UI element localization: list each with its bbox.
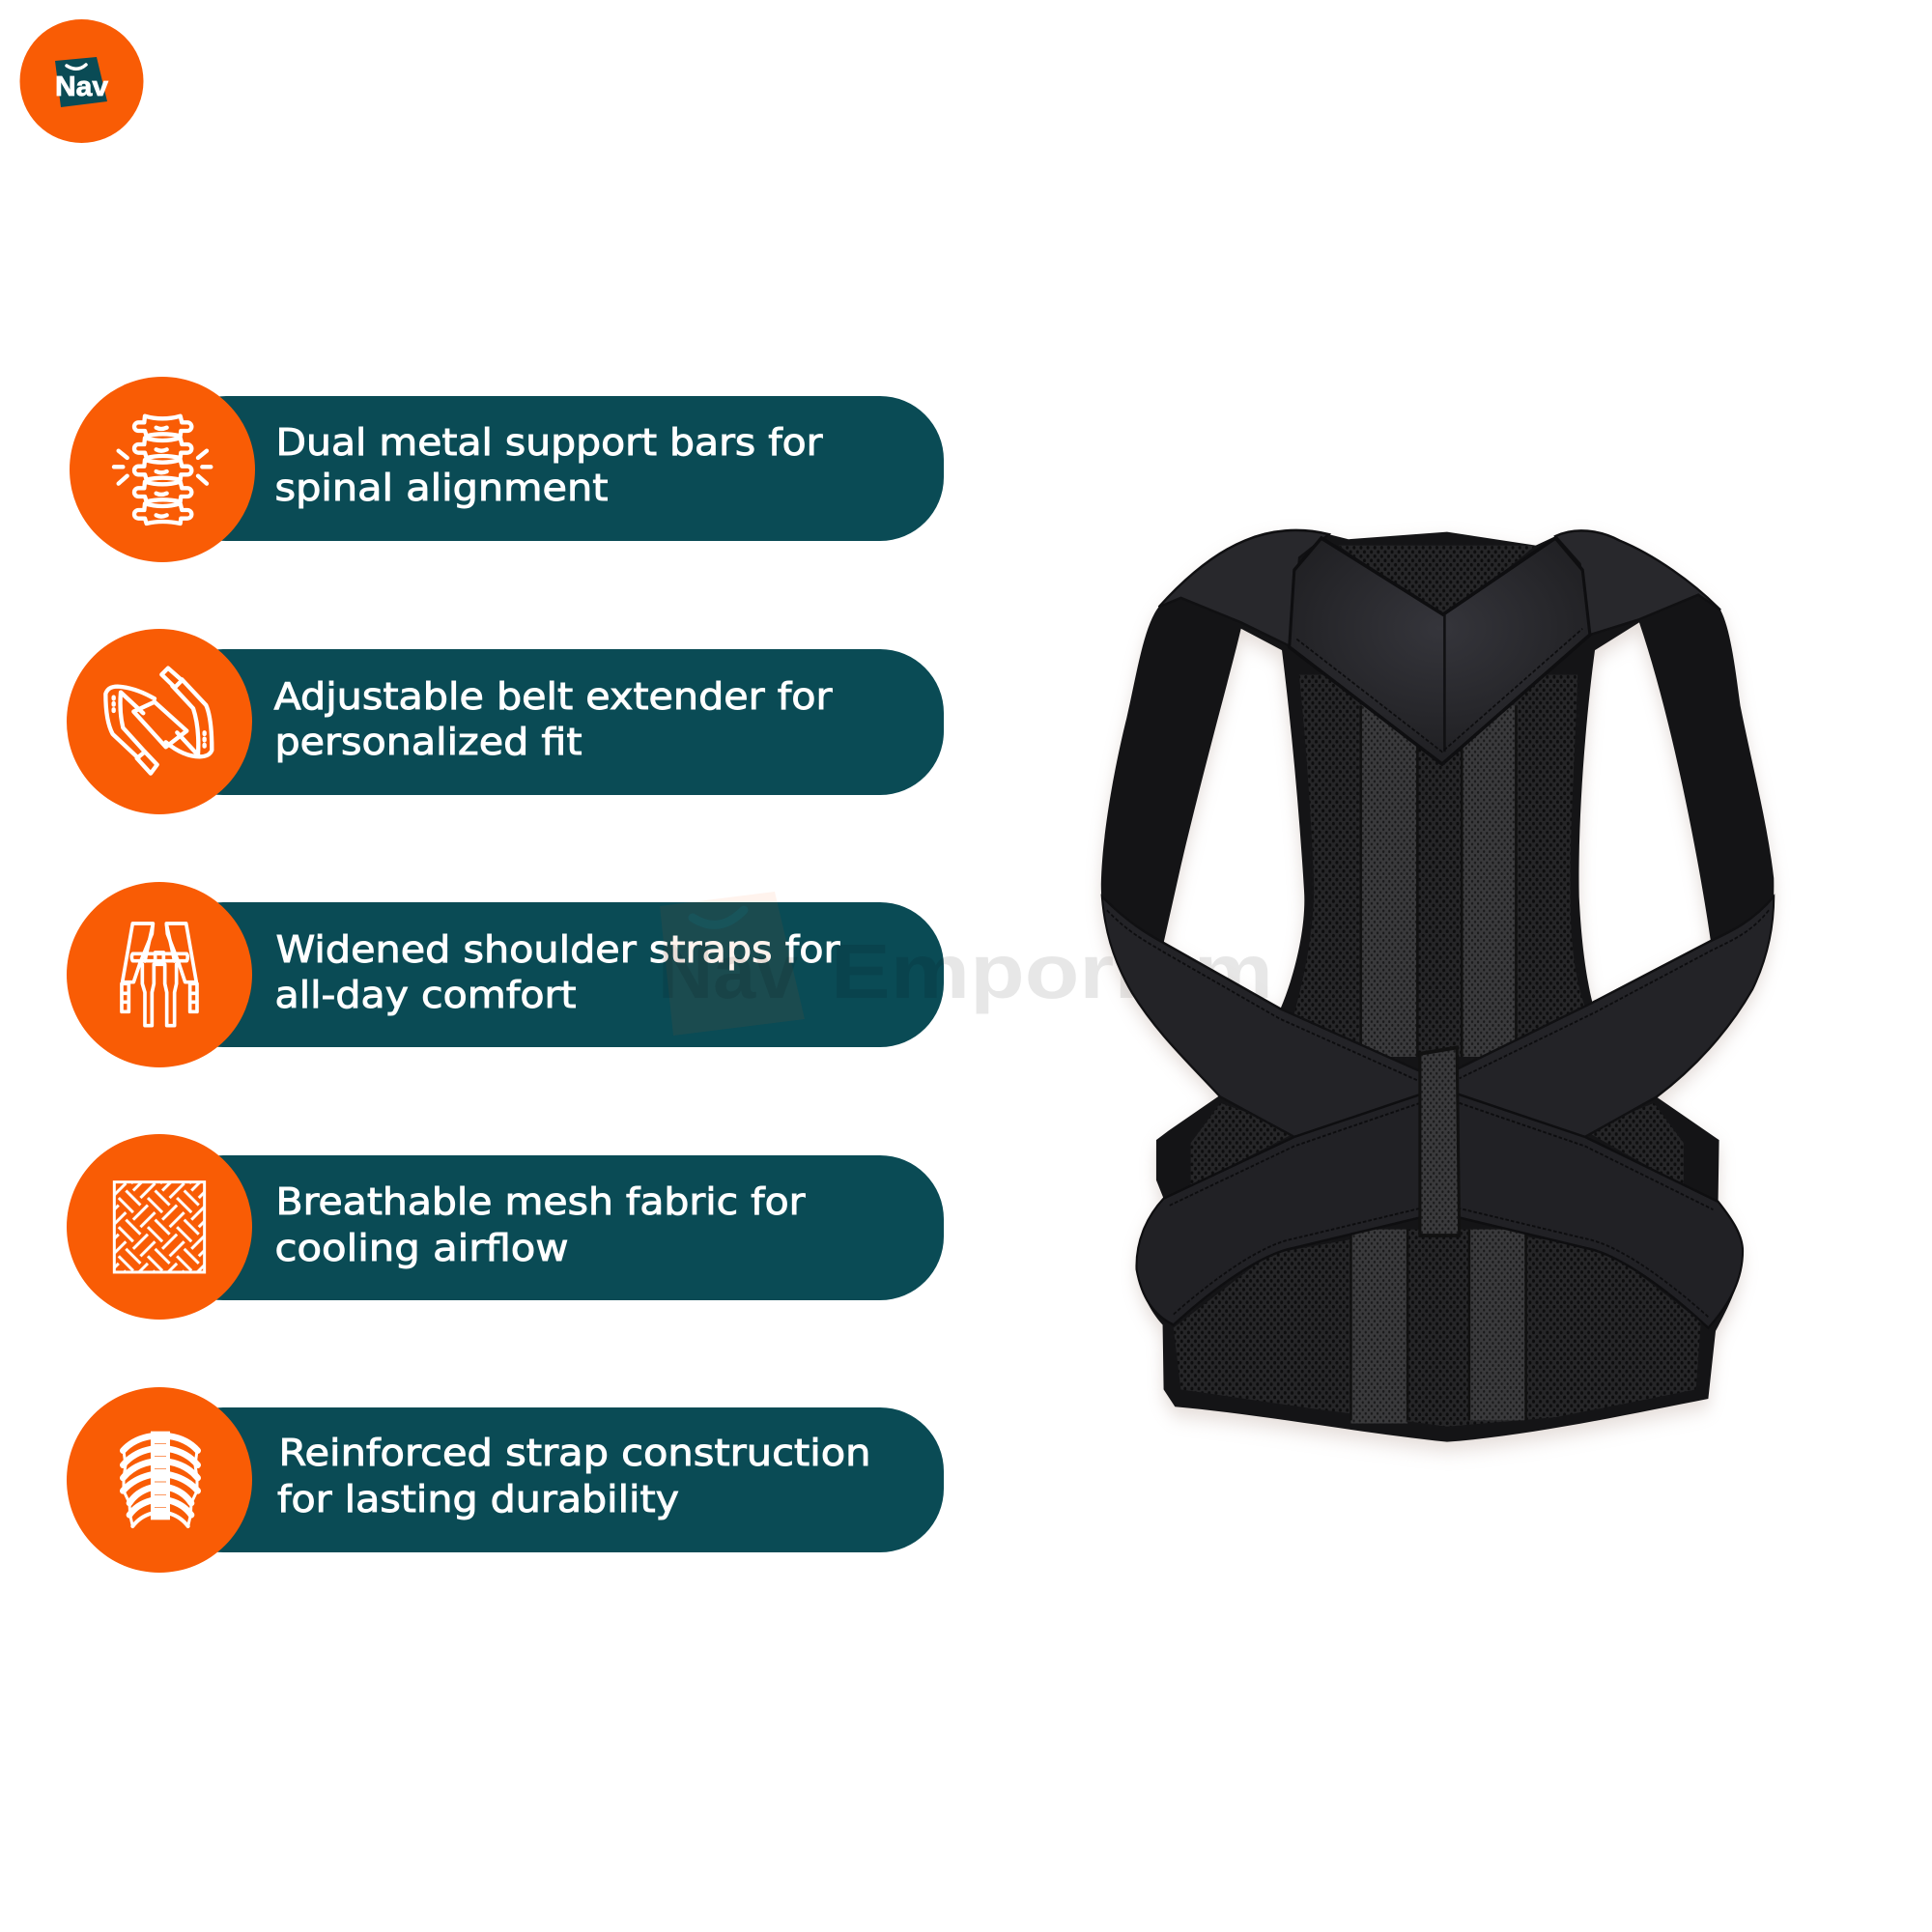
watermark: Nav Emporium [658,892,1273,1036]
text: feature 4: cooling airflow [274,1227,568,1269]
text: feature 3 [274,928,840,1016]
strap: centre loop [1420,1047,1460,1236]
text: feature 3: all-day comfort [274,974,576,1016]
strap: lower waist belt [1136,1094,1743,1328]
icon: spine [114,416,211,524]
strap: upper crossing straps [1102,896,1774,1137]
panel: feature 5 reinforced straps [67,1387,944,1573]
strap: shoulder tops [1158,530,1720,647]
text: feature 4 [274,1180,806,1269]
icon: rib cage [123,1432,198,1526]
text: feature 5: Reinforced strap construction [278,1432,871,1474]
panel: shoulder yoke [1290,538,1590,764]
text: feature 5: for lasting durability [277,1478,679,1520]
back mesh panel [1294,675,1587,1057]
text: feature 3: Widened shoulder straps for [276,928,840,971]
text: feature 2: Adjustable belt extender for [274,675,833,718]
text: feature 2 [274,675,833,763]
watermark: Nav Emporium: Nav [658,928,798,1014]
text: feature 4: Breathable mesh fabric for [276,1180,806,1223]
panel: feature 4 breathable mesh [67,1134,944,1320]
lower mesh panel [1174,1103,1701,1427]
logo badge: Nav [55,71,108,102]
panel: feature 2 adjustable belt [67,629,944,814]
panel: feature 3 shoulder straps [67,882,944,1067]
icon: mesh fabric [114,1182,205,1272]
text: feature 1 [274,421,823,509]
text: feature 1: spinal alignment [274,467,609,509]
icon: belt extender [105,668,212,774]
text: feature 2: personalized fit [274,721,582,763]
text: feature 5 [277,1432,871,1520]
product: posture corrector vest [1101,530,1774,1451]
icon: shoulder straps [122,923,197,1026]
text: feature 1: Dual metal support bars for [276,421,823,464]
panel: neck mesh [1339,546,1536,619]
logo badge [19,19,143,143]
panel: feature 1 spinal alignment [70,377,944,562]
watermark: Nav Emporium: Emporium [831,928,1273,1014]
